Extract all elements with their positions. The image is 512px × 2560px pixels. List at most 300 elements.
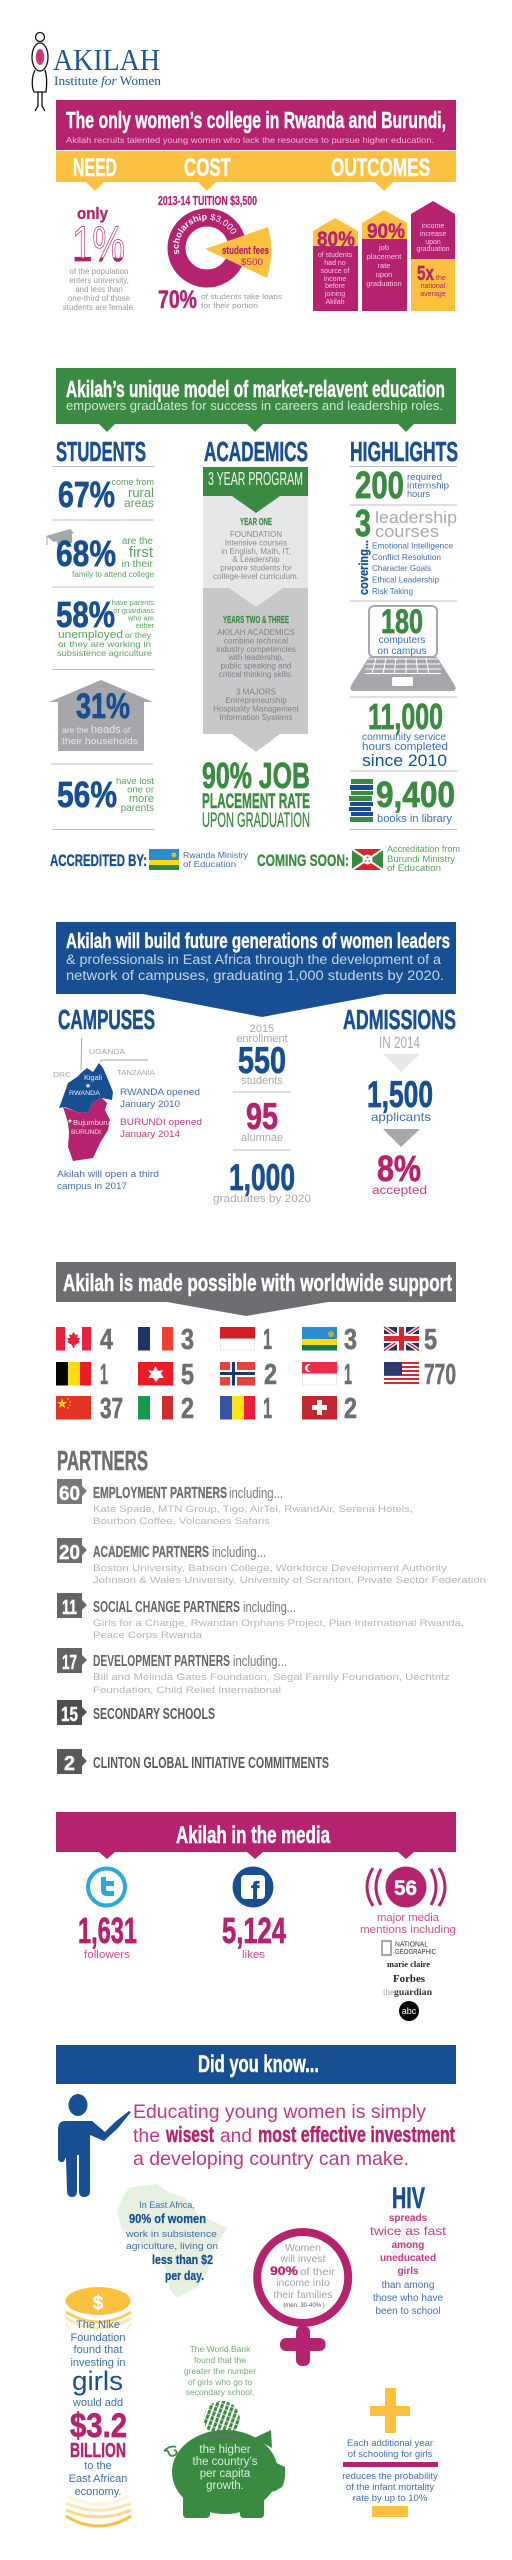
text: 1 — [100, 1359, 108, 1391]
fact: Nike Foundation coin stack: Foundation — [70, 2332, 126, 2344]
highlight: 3 leadership courses: Risk Taking — [372, 586, 413, 596]
admissions funnel: accepted — [372, 1183, 427, 1197]
highlight: 3 leadership courses: leadership — [375, 508, 457, 527]
flag: Indonesia 1: 1 — [263, 1324, 272, 1356]
stat: 68 percent first in family: are the — [122, 536, 153, 547]
stat: 31 percent heads of households in house icon: their households — [62, 736, 138, 747]
fact: HIV spreads twice as fast: uneducated — [380, 2253, 436, 2264]
fact: HIV spreads twice as fast: those who have — [373, 2293, 443, 2304]
panel: academics three year program: 3 YEAR PROGRAM — [208, 469, 303, 489]
fact: female symbol income invested: will invest — [280, 2253, 326, 2265]
highlight: 11,000 community service hours: since 2010 — [362, 751, 447, 770]
partners row: 60 employment: including... — [229, 1485, 283, 1502]
accreditation: Rwanda Ministry of Education: Rwanda Ministry — [183, 850, 249, 860]
partners row: 2 Clinton Global Initiative — [57, 1749, 329, 1775]
panel: academics three year program: industry competencies — [216, 645, 296, 654]
stat: 58 percent parents unemployed: subsistence agriculture — [57, 648, 152, 658]
fact: World Bank piggy bank: of girls who go to — [188, 2377, 252, 2387]
fact: World Bank piggy bank: secondary school, — [186, 2387, 254, 2397]
flag: Belgium 1 — [56, 1359, 108, 1391]
stat: 90 percent job placement rate: PLACEMENT RATE — [202, 789, 310, 813]
icon: book stack with 9,400 books: 9,400 — [376, 774, 455, 815]
flag: Rwanda 3: 3 — [344, 1324, 357, 1356]
callout: educating young women: wisest — [165, 2122, 214, 2147]
panel: academics three year program: Entrepreneurship — [225, 696, 287, 705]
cost: tuition donut chart: 70% — [158, 286, 197, 314]
highlight: 3 leadership courses: Emotional Intelligence — [372, 540, 453, 550]
icon: book stack with 9,400 books: books in library — [377, 813, 452, 825]
outcomes bar: 90 percent: job — [378, 243, 389, 252]
map: Rwanda and Burundi campuses: UGANDA — [89, 1047, 125, 1056]
flag: Romania 1 — [220, 1393, 272, 1425]
stat: 67 percent rural: rural — [128, 485, 154, 500]
admissions funnel: 1,500 — [367, 1074, 433, 1115]
stat: 67 percent rural: come from — [111, 477, 154, 487]
panel: model green banner: empowers graduates for success in careers and leadership roles. — [66, 399, 443, 413]
icon: presenter figure — [58, 2094, 131, 2197]
fact: World Bank piggy bank: found that the — [194, 2355, 246, 2365]
fact: plus and minus infant mortality: rate by up to 10% — [353, 2493, 428, 2504]
cost: tuition donut chart — [158, 193, 282, 314]
highlight: 3 leadership courses: Ethical Leadership — [372, 574, 439, 584]
partners row: 17 development: DEVELOPMENT PARTNERS — [93, 1653, 230, 1670]
flag: United Kingdom 5: 5 — [424, 1324, 437, 1356]
panel: academics three year program: public speaking and — [221, 662, 291, 670]
stat: 67 percent rural: 67% — [58, 474, 115, 515]
partners row: 20 academic: 20 — [59, 1542, 80, 1564]
highlight: 11,000 community service hours — [362, 696, 448, 770]
accreditation: Burundi Ministry of Education coming soon: Accreditation from — [387, 844, 460, 854]
fact: plus and minus infant mortality: of the infant mortality — [346, 2482, 434, 2493]
panel: academics three year program: 3 MAJORS — [236, 688, 276, 696]
highlight: 11,000 community service hours: hours completed — [362, 741, 448, 753]
flag: Indonesia 1 — [220, 1324, 272, 1356]
partners row: 20 academic: ACADEMIC PARTNERS — [93, 1544, 209, 1561]
stats: enrollment alumnae graduates: enrollment — [236, 1033, 288, 1045]
partners row: 15 secondary schools: 15 — [61, 1704, 78, 1726]
panel: academics three year program: Intensive courses — [225, 538, 287, 548]
need: only 1 percent: only — [77, 204, 108, 223]
fact: HIV spreads twice as fast — [370, 2182, 447, 2317]
panel: academics three year program: critical thinking skills. — [219, 670, 293, 679]
panel: did you know blue banner: Did you know... — [198, 2051, 319, 2078]
stat: 58 percent parents unemployed: or they — [125, 631, 151, 640]
cost: tuition donut chart: 2013-14 TUITION $3,500 — [158, 193, 257, 208]
logo: Akilah Institute for Women: AKILAH — [53, 42, 160, 77]
panel: academics three year program: prepare students for — [220, 564, 292, 572]
highlight: 3 leadership courses: 3 — [355, 503, 371, 545]
fact: female symbol income invested: income into — [276, 2277, 330, 2289]
outcomes bar: 80 percent: before — [325, 283, 345, 290]
column heading: academics: ACADEMICS — [204, 436, 308, 467]
admissions funnel: 8% — [377, 1148, 421, 1189]
fact: HIV spreads twice as fast: spreads — [389, 2213, 428, 2224]
partners row: 2 Clinton Global Initiative: 2 — [64, 1753, 75, 1775]
need: only 1 percent: and less than — [75, 285, 123, 294]
media: 56 mentions and outlets: guardian — [394, 1987, 432, 1997]
partners row: 11 social change: Peace Corps Rwanda — [93, 1630, 203, 1641]
panel: need cost outcomes header band: NEED — [73, 154, 117, 182]
media: 56 mentions and outlets: GEOGRAPHIC — [395, 1949, 436, 1956]
fact: Nike Foundation coin stack: girls — [72, 2366, 123, 2396]
cost: tuition donut chart: scholarship $3,000 — [172, 214, 236, 254]
stat: 58 percent parents unemployed: who are — [127, 614, 154, 622]
outcomes bar: income increase 5x: 5x — [417, 263, 434, 285]
partners row: 11 social change: SOCIAL CHANGE PARTNERS — [93, 1599, 240, 1616]
partners row: 60 employment: Kate Spade, MTN Group, Tigo, AirTel, RwandAir, Serena Hotels, — [93, 1504, 413, 1515]
flag: Switzerland 2: 2 — [344, 1393, 357, 1425]
outcomes bar: 80 percent: of students — [318, 252, 353, 259]
fact: Nike Foundation coin stack: $ — [93, 2293, 104, 2314]
map: Rwanda and Burundi campuses: Kigali — [84, 1075, 102, 1082]
flag: Norway 2 — [220, 1359, 277, 1391]
partners row: 20 academic — [57, 1538, 486, 1586]
fact: Nike Foundation coin stack: economy. — [75, 2486, 121, 2498]
fact: female symbol income invested: of their — [300, 2266, 336, 2278]
stat: 31 percent heads of households in house icon: 31% — [76, 687, 130, 726]
outcomes bar: 80 percent: Akilah — [325, 299, 345, 306]
stat: 58 percent parents unemployed: either — [136, 621, 155, 630]
campus openings text: campus in 2017 — [57, 1181, 127, 1192]
stat: 67 percent rural: areas — [124, 496, 154, 510]
callout: educating young women: Educating young women is simply — [133, 2101, 426, 2123]
fact: female symbol income invested: Women — [285, 2242, 321, 2254]
outcomes bar: 80 percent: income — [324, 276, 346, 283]
flag: Hong Kong 5: 5 — [181, 1359, 194, 1391]
fact: Nike Foundation coin stack: found that — [74, 2344, 122, 2356]
outcomes bar: 90 percent: placement — [367, 252, 402, 261]
stat: 31 percent heads of households in house icon: are the heads of — [62, 724, 131, 736]
highlight: 3 leadership courses: Conflict Resolution — [372, 552, 441, 562]
flag: Canada 4: 4 — [100, 1324, 113, 1356]
flag: China 37: 37 — [100, 1393, 123, 1425]
cost: tuition donut chart: student fees — [222, 245, 269, 257]
campus openings text — [57, 1087, 202, 1192]
panel: academics three year program: Hospitality Management — [213, 704, 300, 714]
flag: Romania 1: 1 — [263, 1393, 272, 1425]
admissions funnel — [343, 1004, 456, 1197]
fact: female symbol income invested — [257, 2232, 348, 2366]
flag: China 37 — [56, 1393, 123, 1425]
flag: United States 770 — [384, 1359, 456, 1391]
fact: World Bank piggy bank: the higher — [199, 2444, 251, 2456]
panel: academics three year program: & Leadership — [232, 555, 280, 564]
fact: World Bank piggy bank — [164, 2344, 285, 2518]
callout: educating young women: and — [220, 2125, 252, 2147]
accreditation: Burundi Ministry of Education coming soon: COMING SOON: — [257, 851, 349, 870]
media: 56 mentions and outlets: major media — [377, 1912, 440, 1924]
flag: France 3: 3 — [181, 1324, 194, 1356]
map: Rwanda and Burundi campuses — [53, 1038, 155, 1161]
outcomes bar: income increase 5x: income — [422, 223, 444, 230]
outcomes bar: income increase 5x: average — [420, 291, 446, 298]
map: Rwanda and Burundi campuses: ★ — [67, 1118, 73, 1125]
fact: plus and minus infant mortality — [342, 2388, 438, 2517]
media: facebook likes: f — [251, 1877, 260, 1905]
fact: Africa subsistence agriculture: work in subsistence — [125, 2229, 217, 2239]
media: 56 mentions and outlets: abc — [402, 2006, 417, 2016]
stat: 58 percent parents unemployed: or they are working in — [58, 639, 151, 649]
heading: partners: PARTNERS — [57, 1445, 148, 1476]
logo: Akilah Institute for Women — [32, 32, 161, 111]
fact: Nike Foundation coin stack: BILLION — [70, 2440, 126, 2462]
stat: 68 percent first in family: 68% — [56, 533, 116, 574]
campus openings text: January 2014 — [120, 1129, 180, 1140]
outcomes bar: 80 percent — [313, 218, 358, 311]
accreditation: Rwanda Ministry of Education: ACCREDITED BY: — [50, 851, 147, 870]
fact: female symbol income invested: 90% — [270, 2264, 298, 2278]
stat: 58 percent parents unemployed — [56, 594, 155, 658]
accreditation: Rwanda Ministry of Education — [50, 849, 249, 870]
need: only 1 percent: students are female. — [63, 303, 135, 312]
outcomes bar: 80 percent: source of — [321, 268, 349, 275]
stats: enrollment alumnae graduates: graduates by 2020 — [213, 1193, 311, 1205]
campus openings text: Akilah will open a third — [57, 1169, 159, 1180]
outcomes bar: income increase 5x: graduation — [416, 246, 450, 253]
partners row: 15 secondary schools — [57, 1700, 215, 1726]
partners row: 60 employment: 60 — [59, 1483, 80, 1505]
partners row: 17 development: including... — [233, 1653, 287, 1670]
outcomes bar: 80 percent: 80% — [317, 228, 355, 251]
stats: enrollment alumnae graduates: 95 — [246, 1096, 278, 1137]
stat: 56 percent lost parents: one or — [127, 784, 154, 796]
partners row: 20 academic: including... — [212, 1544, 266, 1561]
highlight: 11,000 community service hours: community service — [362, 732, 446, 743]
text: 1 — [344, 1359, 352, 1391]
cost: tuition donut chart: $500 — [241, 257, 263, 268]
fact: World Bank piggy bank: The World Bank — [190, 2344, 251, 2354]
callout: educating young women: the — [133, 2125, 160, 2147]
panel: need cost outcomes header band: OUTCOMES — [331, 154, 430, 182]
callout: educating young women: a developing country can make. — [133, 2148, 409, 2170]
media: 56 mentions and outlets: mentions including — [360, 1924, 456, 1936]
panel: did you know blue banner — [56, 2045, 456, 2084]
outcomes bar: 90 percent: rate — [378, 261, 390, 270]
partners row: 17 development: Foundation, Child Relief International — [93, 1685, 281, 1696]
panel: academics three year program: YEAR ONE — [240, 517, 272, 528]
stat: 68 percent first in family: family to attend college — [72, 570, 155, 579]
media: 56 mentions and outlets: Forbes — [393, 1973, 426, 1985]
stat: 56 percent lost parents: 56% — [57, 774, 117, 815]
outcomes bar: income increase 5x: the — [436, 275, 446, 282]
panel: intro magenta banner: Akilah recruits talented young women who lack the resources to pursue higher education. — [66, 135, 434, 145]
stat: 58 percent parents unemployed: unemployed — [58, 629, 123, 641]
outcomes bar: 80 percent: had no — [324, 260, 346, 267]
fact: Nike Foundation coin stack: would add — [72, 2397, 123, 2409]
media: 56 mentions and outlets: marie claire — [387, 1960, 430, 1969]
heading: campuses: CAMPUSES — [58, 1004, 155, 1035]
stats: enrollment alumnae graduates — [213, 1023, 311, 1205]
icon: laptop with 180 computers — [350, 603, 456, 691]
fact: World Bank piggy bank: greater the number — [184, 2366, 256, 2376]
accreditation: Burundi Ministry of Education coming soon: Burundi Ministry — [387, 854, 456, 864]
flag: Italy 2: 2 — [181, 1393, 194, 1425]
fact: World Bank piggy bank: growth. — [206, 2480, 244, 2492]
highlight: 200 internship hours: internship — [407, 480, 449, 492]
outcomes bar: income increase 5x: upon — [425, 239, 441, 246]
panel: model green banner — [56, 368, 456, 432]
partners row: 15 secondary schools: SECONDARY SCHOOLS — [93, 1706, 215, 1723]
panel: academics three year program: FOUNDATION — [230, 530, 282, 539]
accreditation: Rwanda Ministry of Education: of Education — [183, 859, 236, 869]
flag: France 3 — [138, 1324, 194, 1356]
logo: Akilah Institute for Women: Institute for Women — [54, 73, 161, 88]
flag: Rwanda 3 — [302, 1324, 357, 1356]
outcomes bar: 90 percent: 90% — [367, 220, 405, 243]
flag: Canada 4 — [56, 1324, 113, 1356]
partners row: 11 social change: 11 — [62, 1597, 77, 1619]
panel: academics three year program: with leadership, — [227, 653, 284, 662]
fact: female symbol income invested: (men: 30-40% ) — [283, 2303, 325, 2309]
map: Rwanda and Burundi campuses: Bujumburu — [73, 1120, 110, 1127]
media: twitter followers — [78, 1868, 137, 1961]
campus openings text: BURUNDI opened — [120, 1117, 202, 1128]
stat: 56 percent lost parents: parents — [121, 803, 154, 814]
stat: 56 percent lost parents: have lost — [116, 776, 154, 787]
stats: enrollment alumnae graduates: 1,000 — [229, 1157, 295, 1198]
media: 56 mentions and outlets: the — [383, 1987, 394, 1997]
admissions funnel: IN 2014 — [379, 1033, 420, 1052]
fact: HIV spreads twice as fast: twice as fast — [370, 2224, 447, 2238]
flag: Singapore 1 — [302, 1359, 352, 1391]
fact: World Bank piggy bank: per capita — [200, 2468, 251, 2480]
need: only 1 percent: enters university, — [69, 276, 129, 285]
partners row: 17 development — [57, 1648, 450, 1696]
flag: Italy 2 — [138, 1393, 194, 1425]
panel: academics three year program: college-level curriculum. — [213, 572, 299, 581]
media: 56 mentions and outlets: NATIONAL — [395, 1942, 428, 1948]
column heading: students: STUDENTS — [56, 436, 146, 467]
highlight: 3 leadership courses: courses — [375, 522, 439, 541]
media: twitter followers: 1,631 — [78, 1910, 137, 1951]
stat: 58 percent parents unemployed: have parents — [112, 598, 154, 607]
highlight: 200 internship hours — [355, 465, 449, 507]
panel: academics three year program: YEARS TWO & THREE — [223, 615, 289, 626]
accreditation: Burundi Ministry of Education coming soon: of Education — [387, 863, 441, 873]
partners row: 17 development: Bill and Melinda Gates Foundation, Segal Family Foundation, Uechtritz — [93, 1672, 450, 1683]
fact: HIV spreads twice as fast: HIV — [392, 2182, 425, 2215]
stats: enrollment alumnae graduates: 2015 — [250, 1023, 274, 1035]
outcomes bar: 90 percent — [362, 210, 407, 311]
highlight: 3 leadership courses: covering... — [356, 540, 371, 595]
stat: 31 percent heads of households in house icon — [49, 680, 153, 751]
panel: need cost outcomes header band: COST — [184, 154, 231, 182]
fact: Africa subsistence agriculture: less than $2 — [152, 2252, 213, 2267]
highlight: 200 internship hours: hours — [407, 489, 430, 500]
media: 56 mentions and outlets: 56 — [394, 1877, 417, 1900]
partners row: 11 social change: including... — [243, 1599, 296, 1616]
partners row: 20 academic: Johnson & Wales University, University of Scranton, Private Sector Federation — [93, 1575, 486, 1586]
highlight: 3 leadership courses: Character Goals — [372, 563, 431, 573]
panel: future generations blue banner — [56, 922, 456, 1017]
partners row: 2 Clinton Global Initiative: CLINTON GLOBAL INITIATIVE COMMITMENTS — [93, 1755, 329, 1772]
fact: Nike Foundation coin stack — [66, 2287, 131, 2526]
panel: academics three year program: Information Systems — [220, 713, 292, 722]
fact: World Bank piggy bank: the country’s — [192, 2456, 258, 2468]
map: Rwanda and Burundi campuses: RWANDA — [69, 1090, 101, 1097]
panel: need cost outcomes header band — [56, 151, 456, 191]
stat: 68 percent first in family: in their — [121, 558, 154, 570]
stats: enrollment alumnae graduates: alumnae — [241, 1132, 283, 1144]
callout: educating young women — [133, 2101, 455, 2170]
map: Rwanda and Burundi campuses: ★ — [85, 1082, 91, 1090]
highlight: 200 internship hours: required — [407, 472, 442, 483]
highlight: 3 leadership courses — [355, 503, 457, 596]
flag: Switzerland 2 — [302, 1393, 357, 1425]
panel: academics three year program: AKILAH ACADEMICS — [217, 628, 295, 637]
fact: female symbol income invested: their families — [274, 2289, 332, 2301]
fact: Nike Foundation coin stack: East African — [69, 2473, 127, 2485]
cost: tuition donut chart: of students take loans — [201, 292, 282, 301]
outcomes bar: 80 percent: joining — [324, 291, 345, 298]
flag: United States 770: 770 — [424, 1359, 456, 1391]
stats: enrollment alumnae graduates: students — [241, 1075, 283, 1087]
fact: Nike Foundation coin stack: to the — [84, 2460, 112, 2472]
admissions funnel: applicants — [371, 1110, 431, 1124]
outcomes bar: 90 percent: upon — [376, 270, 392, 279]
panel: media magenta banner: Akilah in the media — [176, 1822, 330, 1849]
fact: Africa subsistence agriculture: In East Africa, — [139, 2200, 195, 2210]
icon: laptop with 180 computers: computers — [379, 635, 425, 646]
fact: HIV spreads twice as fast: been to school — [375, 2306, 441, 2317]
partners row: 60 employment — [57, 1479, 413, 1527]
media: facebook likes: 5,124 — [222, 1910, 286, 1951]
campus openings text: January 2010 — [120, 1099, 180, 1110]
media: 56 mentions and outlets — [360, 1866, 456, 2021]
panel: academics three year program: in English, Math, IT, — [221, 547, 291, 556]
panel: academics three year program — [203, 467, 308, 752]
panel: future generations blue banner: network of campuses, graduating 1,000 students by 2020. — [66, 968, 444, 983]
icon: book stack with 9,400 books — [349, 774, 455, 825]
flag: Hong Kong 5 — [138, 1359, 194, 1391]
partners row: 11 social change: Girls for a Change, Rwandan Orphans Project, Plan International Rwanda, — [93, 1618, 464, 1629]
flag: Norway 2: 2 — [264, 1359, 277, 1391]
partners row: 60 employment: EMPLOYMENT PARTNERS — [93, 1485, 227, 1502]
stat: 56 percent lost parents: more — [129, 793, 154, 805]
accreditation: Burundi Ministry of Education coming soon — [257, 844, 460, 873]
media: facebook likes — [222, 1866, 286, 1961]
highlight: 11,000 community service hours: 11,000 — [368, 696, 443, 737]
panel: future generations blue banner: & professionals in East Africa through the development of a — [66, 952, 442, 967]
partners row: 17 development: 17 — [62, 1652, 77, 1674]
partners row: 11 social change — [57, 1593, 464, 1641]
fact: Africa subsistence agriculture — [117, 2184, 227, 2298]
panel: academics three year program: combine technical — [224, 636, 288, 646]
fact: plus and minus infant mortality: Each additional year — [347, 2438, 433, 2449]
media: facebook likes: likes — [242, 1949, 266, 1961]
need: only 1 percent: 1% — [72, 216, 125, 272]
fact: Nike Foundation coin stack: The Nike — [76, 2319, 120, 2331]
map: Rwanda and Burundi campuses: TANZANIA — [117, 1070, 155, 1077]
fact: HIV spreads twice as fast: among — [392, 2240, 424, 2251]
cost: tuition donut chart: for their portion — [201, 301, 258, 310]
stat: 90 percent job placement rate: 90% JOB — [202, 755, 310, 796]
icon: laptop with 180 computers: on campus — [378, 646, 426, 657]
map: Rwanda and Burundi campuses: DRC — [53, 1070, 72, 1079]
fact: Nike Foundation coin stack: $3.2 — [70, 2407, 127, 2445]
flag: United Kingdom 5 — [384, 1324, 437, 1356]
fact: plus and minus infant mortality: reduces the probability — [342, 2471, 438, 2482]
stat: 68 percent first in family: first — [129, 544, 154, 561]
panel: intro magenta banner — [56, 100, 456, 150]
partners row: 20 academic: Boston University, Babson College, Workforce Development Authority — [93, 1563, 447, 1574]
fact: Africa subsistence agriculture: 90% of women — [129, 2211, 206, 2226]
map: Rwanda and Burundi campuses: BURUNDI — [71, 1129, 101, 1136]
need: only 1 percent: of the population — [69, 267, 129, 276]
need: only 1 percent: one-third of those — [68, 294, 131, 303]
campus openings text: RWANDA opened — [120, 1087, 200, 1098]
highlight: 200 internship hours: 200 — [355, 465, 404, 507]
